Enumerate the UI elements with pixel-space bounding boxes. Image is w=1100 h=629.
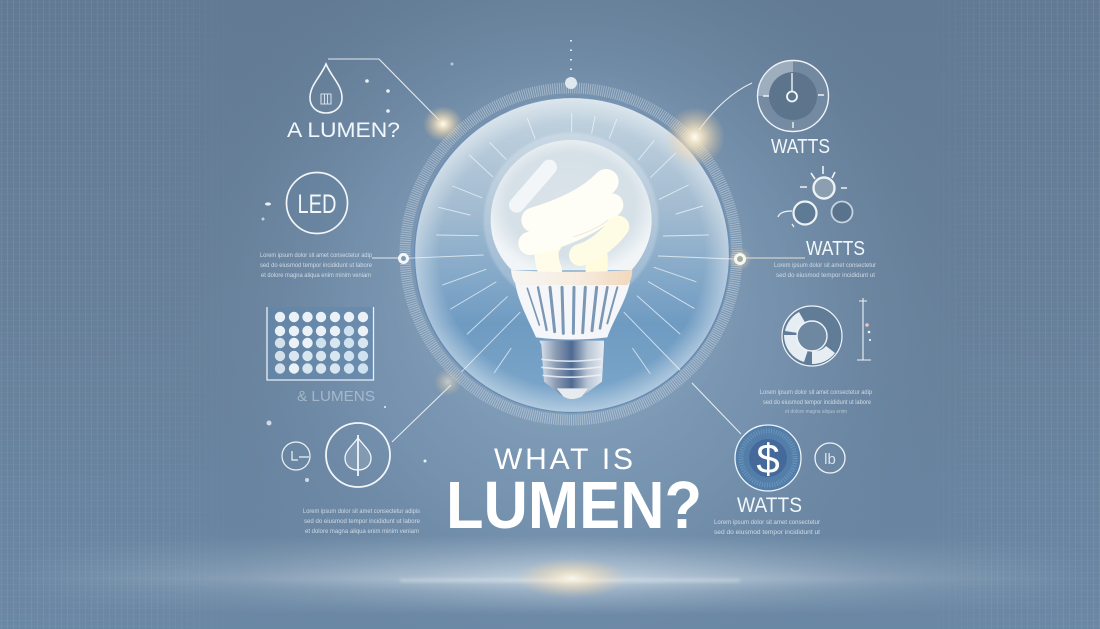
text block: left lower: sed do eiusmod tempor incididunt ut labore (304, 518, 420, 525)
text block: right lower (714, 519, 821, 536)
central lens circle (381, 64, 761, 444)
title line 2: LUMEN? (446, 468, 702, 543)
icon: water drop (310, 64, 342, 113)
icon: small L circle (282, 442, 310, 470)
flare: upper right (665, 107, 725, 167)
text block: left lower: Lorem ipsum dolor sit amet consectetur adipis (303, 508, 420, 515)
decorative sparkles: left (262, 62, 454, 482)
icon: sun and circles (778, 166, 852, 227)
flare: upper left (423, 106, 463, 142)
icon: LED circle: LED (298, 189, 336, 219)
text block: right upper: Lorem ipsum dolor sit amet consectetur (774, 262, 877, 269)
text block: left upper: Lorem ipsum dolor sit amet consectetur adip (260, 252, 372, 259)
text block: right middle (760, 389, 872, 415)
text block: right lower: sed do eiusmod tempor incididunt ut (714, 529, 820, 536)
label: watts 1: WATTS (771, 136, 830, 158)
text block: right upper (774, 262, 877, 279)
light rays (406, 113, 733, 373)
title line 1: WHAT IS (494, 443, 633, 476)
icon: drop in circle (326, 423, 390, 487)
icon: dollar coin (735, 425, 801, 491)
panel: LED dot matrix (267, 307, 374, 380)
text block: right middle: et dolore magna aliqua enim (785, 409, 847, 415)
icon: small lb circle: lb (824, 451, 836, 468)
text block: right middle: Lorem ipsum dolor sit amet consectetur adip (760, 389, 872, 396)
text block: left lower (303, 508, 420, 535)
node: left (398, 253, 409, 264)
node: right (728, 247, 752, 271)
icon: dollar coin: $ (756, 435, 780, 482)
node: top (565, 77, 577, 89)
label: watts 3: WATTS (737, 494, 802, 517)
metal screw base (539, 341, 604, 399)
text block: left upper: et dolore magna aliqua enim minim veniam (261, 272, 371, 279)
tick ring (405, 88, 737, 420)
label: watts 2: WATTS (806, 238, 865, 260)
icon: gauge (758, 60, 828, 132)
connector lines (328, 40, 805, 442)
text block: left lower: et dolore magna aliqua enim minim veniam (305, 528, 419, 535)
text block: left upper (260, 252, 372, 279)
text block: right upper: sed do eiusmod tempor incididunt ut (776, 272, 875, 279)
collar (511, 270, 632, 285)
bottom light glow (400, 558, 740, 598)
flare: lower left (434, 368, 462, 396)
rays and bulb in zoomed coordinates (406, 113, 733, 399)
icon: donut chart (782, 306, 842, 366)
icon: measurement scale (857, 298, 871, 360)
light bulb (484, 133, 658, 399)
title (446, 443, 702, 543)
text block: right lower: Lorem ipsum dolor sit amet consectetur (714, 519, 821, 526)
text block: right middle: sed do eiusmod tempor incididunt ut labore (763, 399, 871, 406)
icon: small lb circle (815, 443, 845, 473)
glass globe (491, 140, 652, 270)
text block: left upper: sed do eiusmod tempor incididunt ut labore (260, 262, 372, 269)
heat-sink body (515, 282, 630, 339)
icon: LED circle (286, 172, 348, 234)
label: a lumen: A LUMEN? (287, 119, 400, 142)
spiral coil (530, 182, 618, 272)
label: lumens: & LUMENS (297, 388, 375, 405)
